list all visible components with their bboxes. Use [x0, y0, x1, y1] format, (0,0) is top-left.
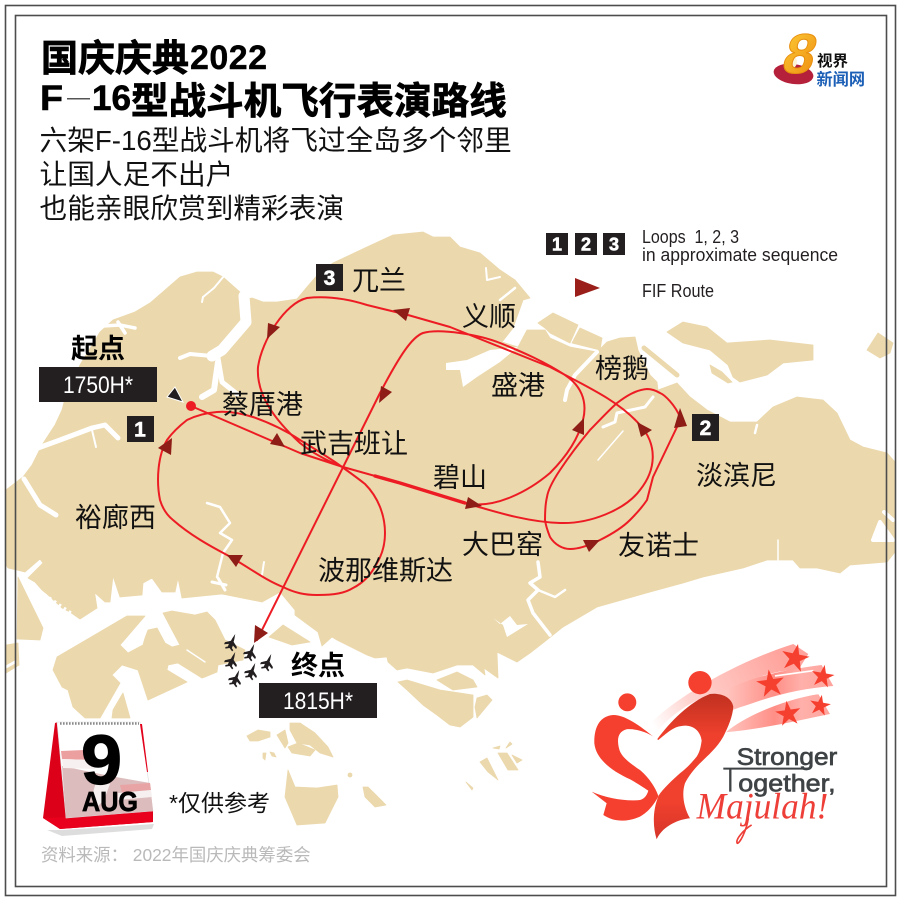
place labels: 波那维斯达 [318, 556, 453, 586]
note: *仅供参考 [169, 790, 270, 816]
logo: 8视界新闻网 [772, 24, 865, 89]
subtitle: 让国人足不出户 [40, 159, 233, 190]
legend: loop number squares: 1 [552, 234, 562, 254]
logo: figures' heads [618, 671, 712, 711]
map: Singapore landmass [6, 232, 895, 825]
place labels: 义顺 [462, 302, 516, 332]
legend: loops text: in approximate sequence [642, 245, 838, 265]
loop marker 3: 3 [324, 267, 335, 290]
logo: slogan: Stronger [737, 744, 837, 771]
legend: loop number squares: 2 [581, 234, 591, 254]
title [40, 38, 507, 122]
legend [546, 227, 838, 301]
loop marker 2: 2 [700, 417, 711, 440]
end label: 1815H* [283, 688, 353, 715]
icon: jet formation [223, 632, 277, 688]
icon: calendar 9 AUG: 9 [81, 721, 122, 799]
start label: 1750H* [63, 372, 133, 399]
source: 资料来源： 2022年国庆庆典筹委会 [41, 845, 311, 865]
end label: 终点 [291, 651, 345, 681]
title: 2022 [190, 39, 267, 77]
loop marker 1 [127, 416, 154, 442]
start label: 起点 [71, 334, 125, 364]
legend: loop number squares [546, 233, 625, 255]
logo: 8视界新闻网: 新闻网 [816, 70, 865, 89]
logo: Stronger Together, Majulah! [592, 641, 837, 843]
subtitle: 六架F-16型战斗机将飞过全岛多个邻里 [40, 125, 512, 156]
legend: loops text [642, 227, 838, 265]
place labels: 榜鹅 [595, 354, 649, 384]
legend: loop number squares: 3 [609, 234, 619, 254]
place labels: 碧山 [433, 463, 487, 493]
subtitle [40, 125, 512, 224]
subtitle: 也能亲眼欣赏到精彩表演 [40, 193, 344, 224]
place labels: 武吉班让 [300, 429, 408, 459]
title: 型战斗机飞行表演路线 [131, 80, 507, 122]
flight routes [158, 297, 680, 640]
logo: stars [755, 641, 836, 726]
logo: slogan [696, 744, 837, 843]
route: merged overlap [375, 476, 465, 503]
place labels: 兀兰 [352, 266, 406, 296]
route arrowheads [158, 308, 687, 643]
title: F [40, 79, 63, 118]
legend: route text: FIF Route [642, 281, 714, 301]
icon: calendar 9 AUG: AUG [82, 786, 138, 817]
route: main path through loop 3 [191, 297, 653, 640]
place labels: 淡滨尼 [696, 461, 777, 491]
title: 16 [92, 79, 131, 118]
icon: calendar 9 AUG [43, 721, 154, 836]
place labels: 蔡厝港 [222, 390, 303, 420]
start label [39, 334, 157, 402]
place labels: 友诺士 [618, 531, 699, 561]
place labels: 大巴窑 [462, 530, 543, 560]
logo: heart ribbon [592, 694, 733, 839]
legend: loops text: Loops 1, 2, 3 [642, 227, 739, 247]
logo: slogan: Majulah! [696, 786, 828, 827]
logo: slogan: ogether, [738, 771, 836, 798]
start point marker [186, 401, 196, 411]
logo: shooting star trails [647, 644, 833, 732]
route: loop 1 [158, 412, 385, 595]
loop marker 3 [316, 264, 343, 291]
logo: 8视界新闻网: 视界 [817, 52, 849, 70]
place labels: 裕廊西 [75, 503, 156, 533]
place labels [75, 266, 777, 586]
end label [259, 651, 377, 718]
legend: arrow [575, 278, 600, 297]
logo: 8视界新闻网: 8 [777, 24, 823, 86]
route: loop 2 [545, 389, 680, 549]
loop marker 2 [692, 414, 719, 441]
loop marker 1: 1 [134, 418, 146, 442]
place labels: 盛港 [491, 371, 545, 401]
icon: start jet pointer [167, 387, 183, 402]
title: 国庆庆典 [41, 38, 189, 79]
